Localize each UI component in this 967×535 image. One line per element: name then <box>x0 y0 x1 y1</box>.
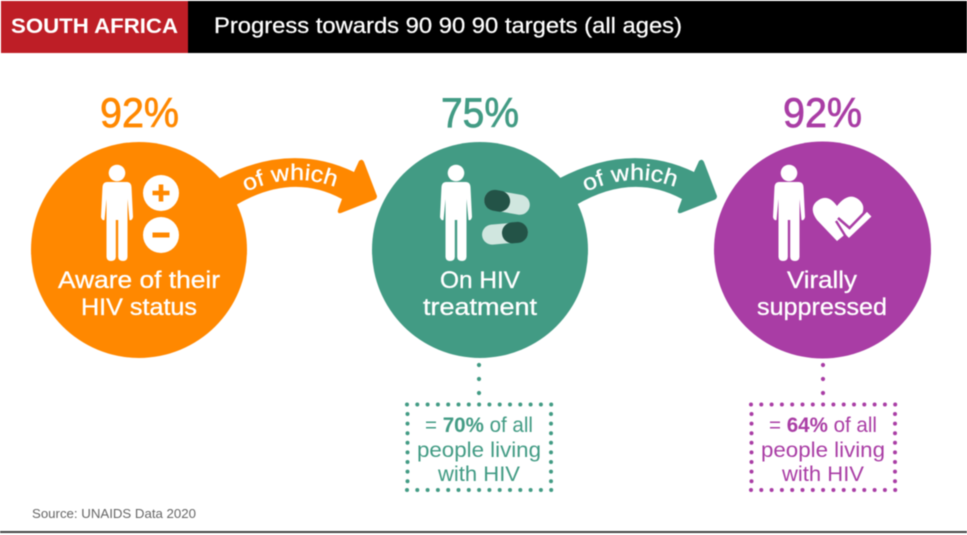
icon: person <box>773 165 805 261</box>
label <box>58 267 220 321</box>
label: suppressed <box>757 294 887 321</box>
icon: heart with check <box>813 197 869 241</box>
percentage 75%: 75% <box>441 89 519 136</box>
callout: 70% of all people living with HIV: = 70% of all <box>425 414 533 437</box>
percentage 92%: 92% <box>100 89 179 136</box>
callout: 70% of all people living with HIV: people living <box>417 439 541 462</box>
icon: minus <box>143 217 179 253</box>
percentage 92%: 92% <box>783 89 862 136</box>
arrow: teal of which: of which <box>583 162 678 191</box>
header title: Progress towards 90 90 90 targets (all ages) <box>214 13 682 38</box>
callout: 64% of all people living with HIV: people living <box>761 439 885 462</box>
label: Virally <box>787 267 857 294</box>
panel: virally suppressed <box>714 89 931 358</box>
arrow: orange of which: of which <box>243 162 338 191</box>
icon: person <box>440 165 472 261</box>
callout: 64% of all people living with HIV: with HIV <box>781 463 864 486</box>
header bar <box>1 1 967 53</box>
icon: pill lower <box>481 221 529 246</box>
arrow: orange of which <box>219 157 378 214</box>
label <box>757 267 887 321</box>
icon: pill upper <box>483 188 531 217</box>
label: Aware of their <box>58 267 220 294</box>
callout: 70% of all people living with HIV: with HIV <box>437 463 520 486</box>
label: On HIV <box>440 267 520 294</box>
header country label: SOUTH AFRICA <box>11 15 178 38</box>
callout: 70% of all people living with HIV <box>407 365 552 490</box>
callout: 64% of all people living with HIV: = 64% of all <box>769 414 877 437</box>
callout: 64% of all people living with HIV <box>751 365 896 490</box>
label: HIV status <box>81 294 197 321</box>
orange circle <box>31 142 247 358</box>
source note: Source: UNAIDS Data 2020 <box>32 507 196 521</box>
purple circle <box>714 142 931 358</box>
panel: on treatment <box>372 89 588 358</box>
label: treatment <box>423 294 537 321</box>
icon: plus <box>143 175 179 211</box>
bottom rule <box>0 531 967 533</box>
label <box>423 267 537 321</box>
panel: aware of status <box>31 89 247 358</box>
arrow: teal of which <box>560 157 718 214</box>
icon: person <box>101 165 133 261</box>
teal circle <box>372 142 588 358</box>
